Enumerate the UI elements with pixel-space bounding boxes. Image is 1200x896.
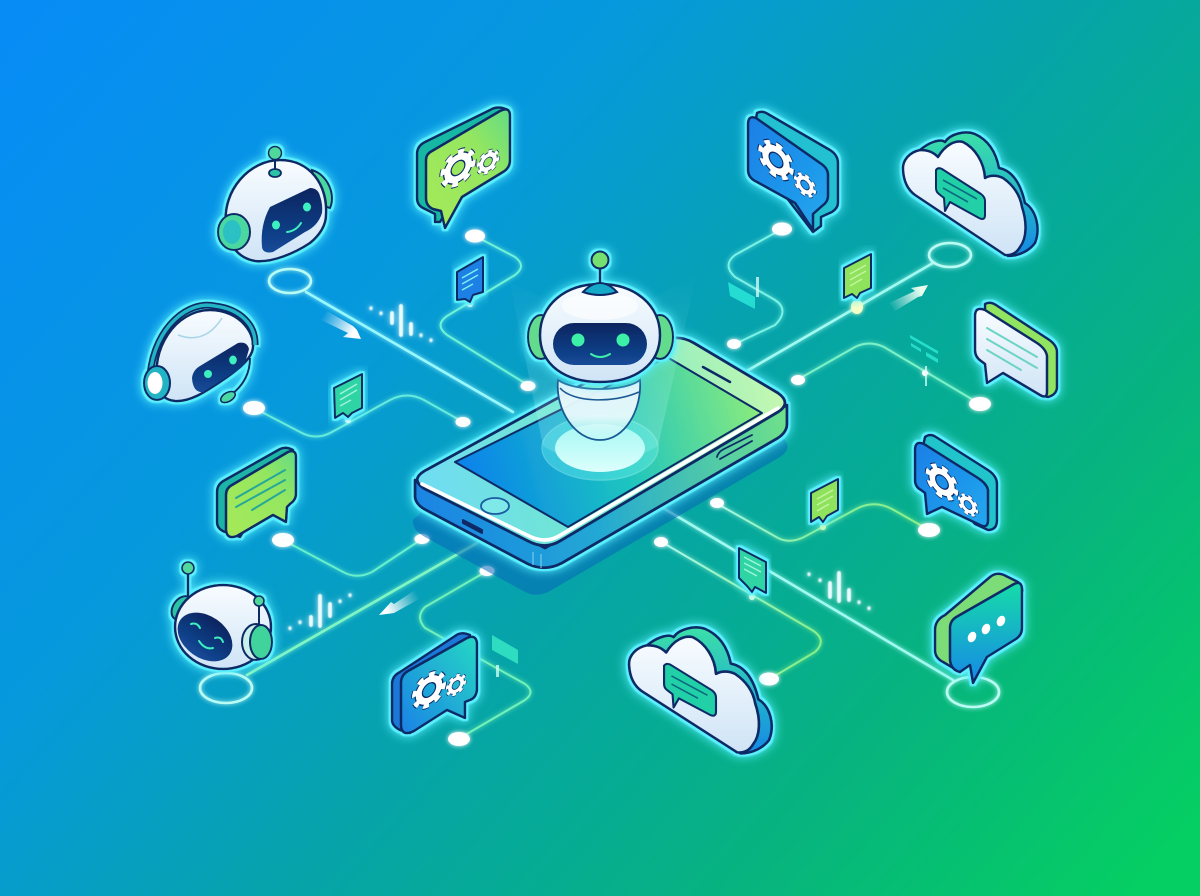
antenna — [274, 160, 276, 170]
phone white rim — [422, 408, 778, 540]
gears — [761, 137, 814, 199]
ring nodes — [200, 243, 999, 707]
bubble: white right — [975, 303, 1057, 397]
cloud: bottom — [629, 627, 772, 753]
small bubble: teal left — [334, 374, 362, 418]
arrow: bottom-left — [379, 590, 421, 615]
ears — [528, 315, 554, 359]
bubble: blue gears top right — [748, 112, 838, 232]
visor — [168, 603, 242, 671]
right ear — [312, 170, 332, 208]
small bubble: lime right — [811, 479, 838, 522]
cloud chat icon — [664, 664, 716, 716]
phone side — [415, 405, 787, 568]
waveform: lower left — [290, 595, 350, 628]
endpoint nodes — [243, 222, 991, 746]
robot: headset — [144, 305, 255, 405]
visor — [553, 323, 647, 365]
bubble: green left — [217, 448, 296, 537]
hologram beam — [510, 273, 697, 463]
antennas — [187, 568, 189, 600]
bubble: blue gears right — [915, 435, 997, 530]
small bubble: lime top — [844, 254, 871, 298]
eyes — [572, 334, 584, 346]
ear — [258, 601, 260, 637]
head — [157, 310, 253, 401]
small bubble: teal lower — [739, 548, 766, 593]
microphone — [232, 358, 250, 394]
robot head assembly — [528, 252, 673, 382]
bubble side and top — [935, 574, 1022, 672]
charging port — [463, 520, 482, 533]
text lines — [987, 328, 1037, 370]
antenna — [599, 269, 601, 288]
cloud front — [903, 142, 1026, 255]
body — [558, 380, 640, 440]
cloud front — [629, 637, 759, 753]
left ear — [218, 214, 250, 250]
ghost hologram marks — [492, 277, 938, 677]
head — [540, 284, 660, 382]
bubble front — [950, 583, 1022, 683]
phone top surface — [417, 338, 785, 546]
connection lines — [254, 229, 980, 738]
cloud: top right — [903, 132, 1038, 256]
waveforms — [290, 306, 869, 628]
side buttons — [717, 435, 752, 459]
visor — [262, 188, 322, 252]
phone screen — [455, 357, 762, 527]
arrow: top-left — [321, 311, 361, 339]
small bubble: blue — [457, 257, 483, 302]
hologram disc — [542, 416, 658, 480]
home button — [481, 498, 509, 514]
bubble: dots bottom right — [935, 574, 1022, 683]
bubble: green gears top — [417, 108, 510, 228]
speaker — [703, 367, 730, 382]
waveform: lower right — [809, 573, 869, 608]
text lines — [236, 470, 285, 510]
headband — [150, 305, 255, 375]
head — [226, 160, 326, 261]
gears — [415, 669, 465, 711]
arrow: top-right — [889, 285, 928, 311]
gears — [443, 146, 498, 190]
gears — [928, 461, 977, 518]
dots — [966, 614, 1007, 644]
eyes — [204, 370, 212, 378]
cloud side — [647, 627, 772, 753]
head — [175, 585, 271, 669]
central robot — [528, 252, 673, 440]
smartphone — [415, 338, 787, 568]
back ear — [167, 592, 197, 624]
main bright lines — [247, 263, 953, 680]
face — [191, 624, 223, 648]
waveform: upper left — [371, 306, 431, 340]
smile — [591, 354, 610, 357]
phone shadow — [413, 435, 788, 595]
visor — [192, 343, 249, 392]
robot: top left — [218, 146, 332, 261]
bubble: blue gears bottom — [392, 633, 477, 733]
face — [272, 220, 280, 230]
ear — [144, 366, 170, 400]
cloud side — [920, 132, 1038, 256]
arrows — [321, 285, 928, 615]
robot: bottom left — [167, 562, 272, 671]
cloud chat icon — [936, 168, 985, 219]
